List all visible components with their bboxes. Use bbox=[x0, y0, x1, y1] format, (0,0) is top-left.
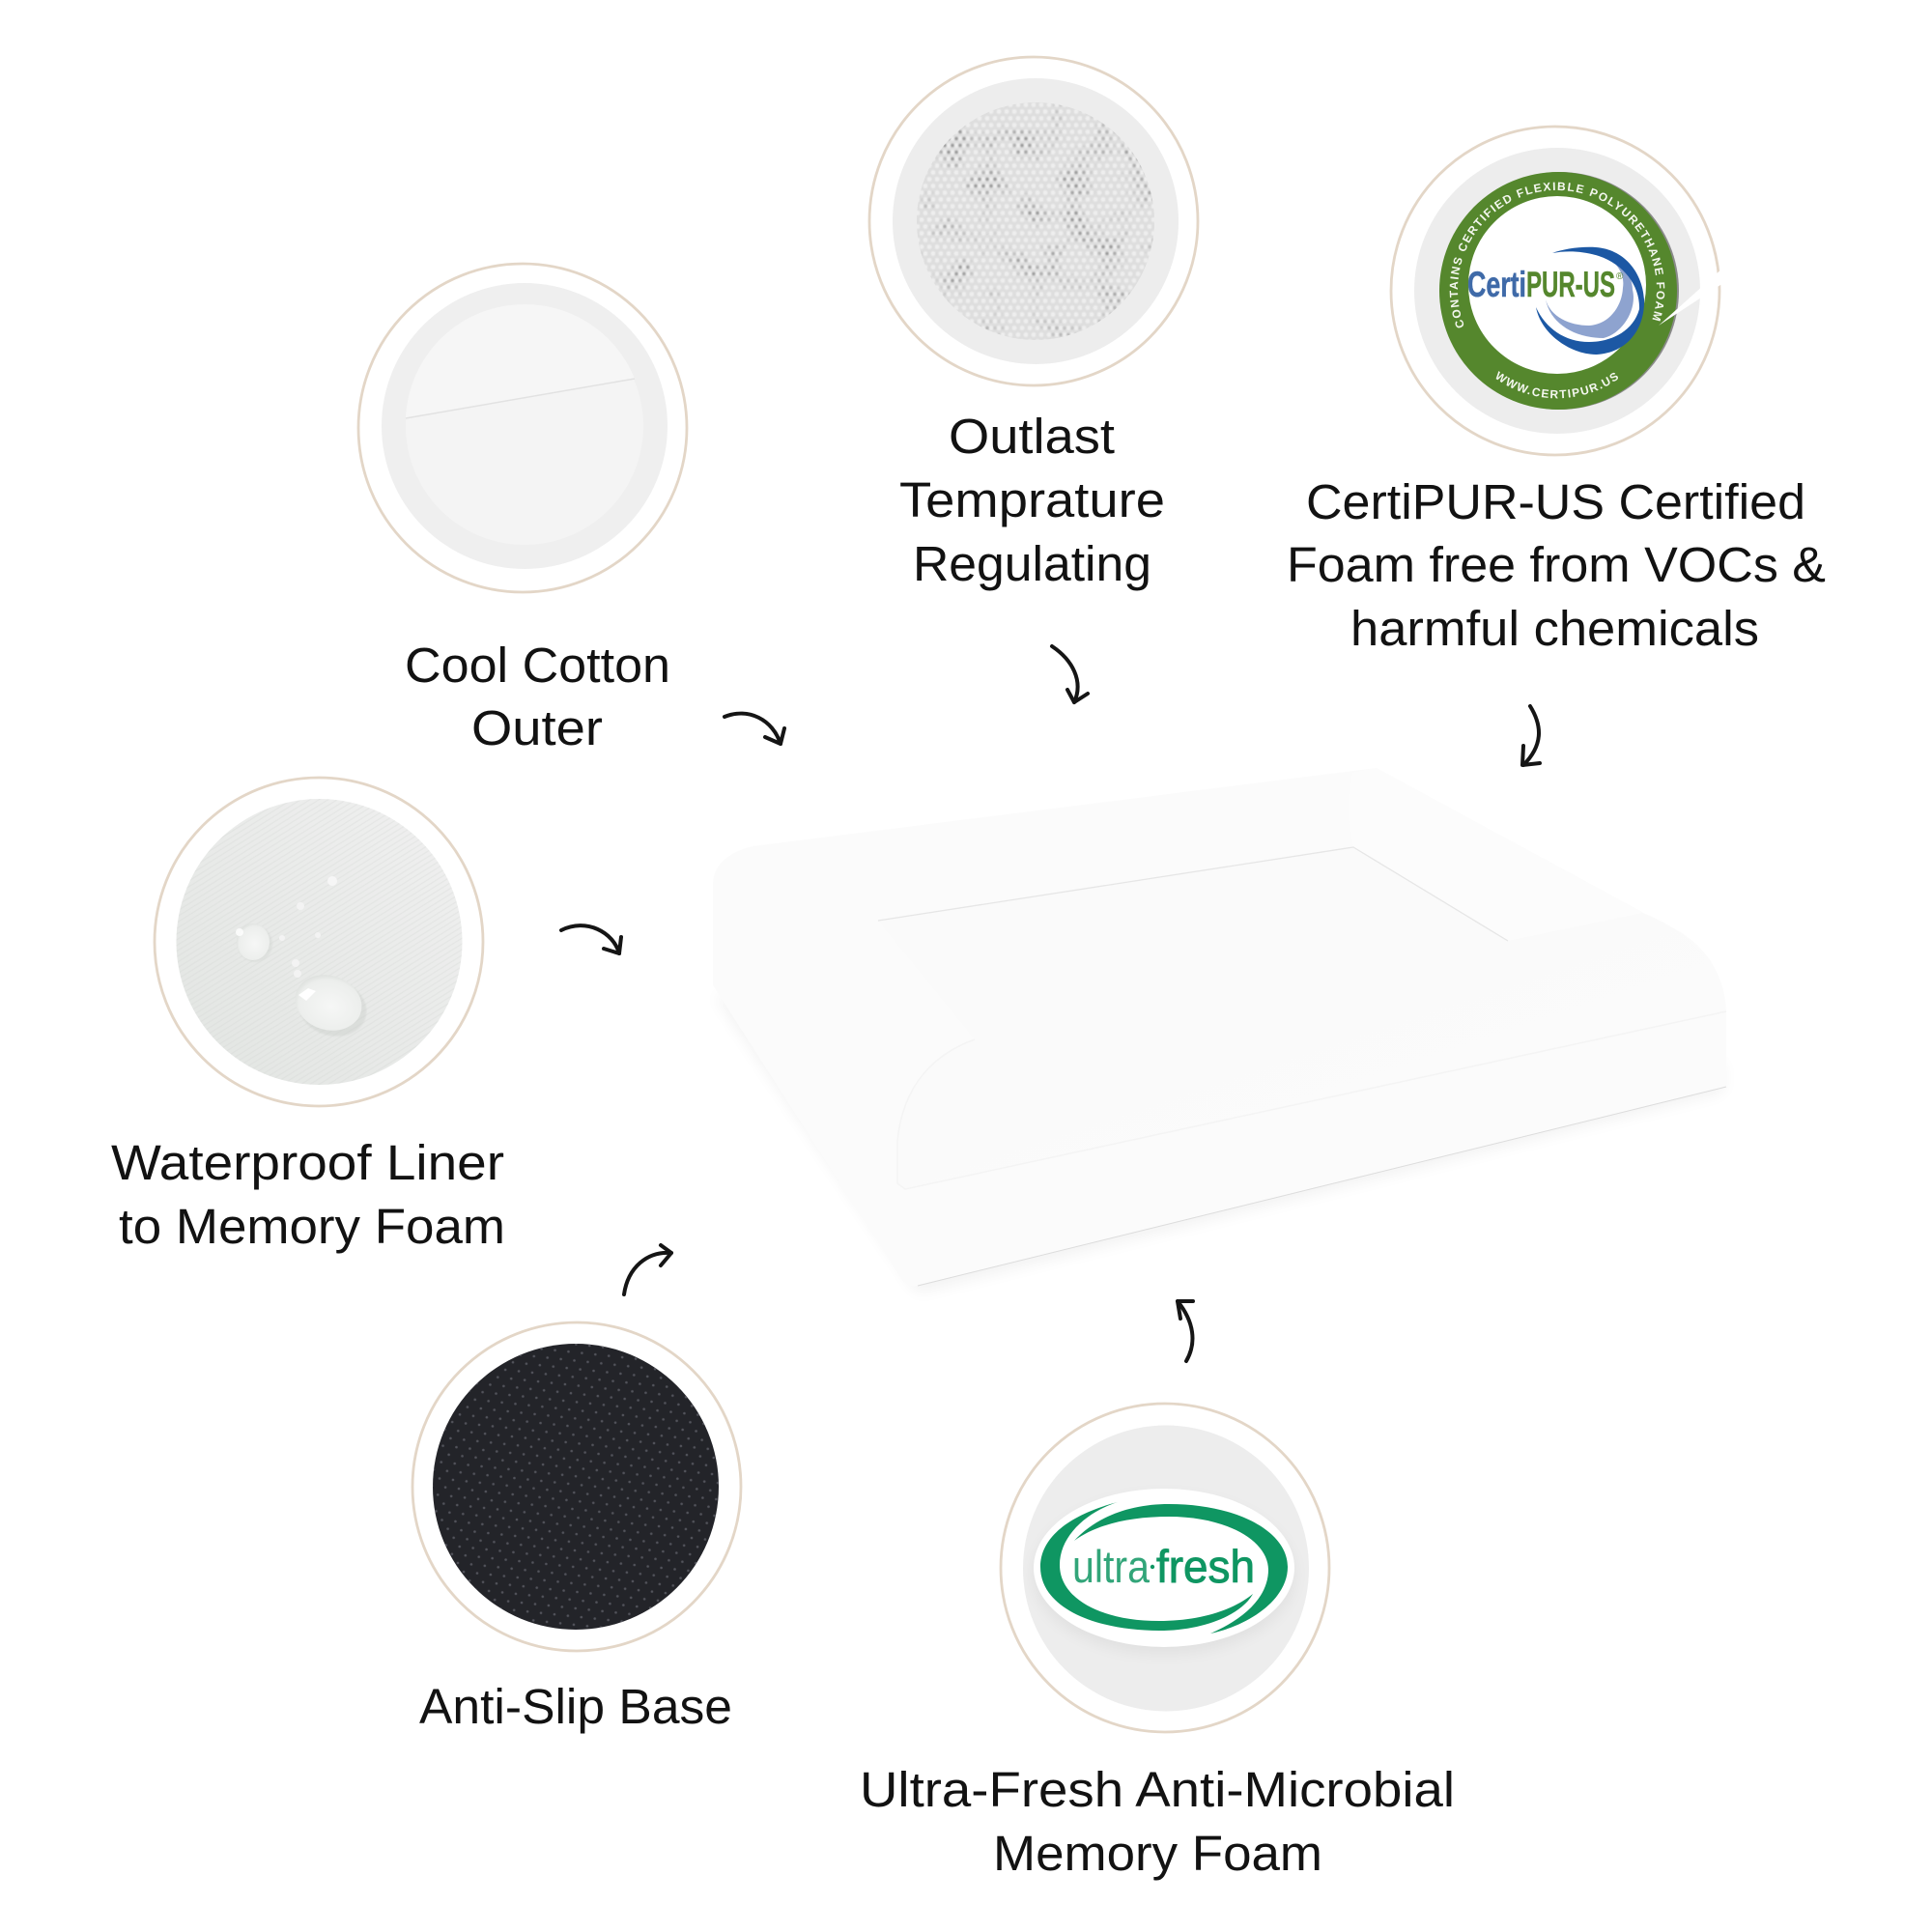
label: certipur-us certified foam: CertiPUR-US Certified bbox=[1306, 474, 1805, 529]
label: waterproof liner to memory foam: Waterproof Liner bbox=[111, 1135, 504, 1190]
badge ring text: WWW.CERTIPUR.US bbox=[1495, 371, 1618, 398]
label: certipur-us certified foam bbox=[1287, 474, 1826, 656]
badge ring text: CONTAINS CERTIFIED FLEXIBLE POLYURETHANE FOAM bbox=[1449, 182, 1665, 328]
feature: ultra-fresh anti-microbial bbox=[860, 1301, 1455, 1881]
cotton swatch circle bbox=[358, 264, 687, 592]
label: certipur-us certified foam: harmful chemicals bbox=[1350, 601, 1759, 656]
certipur-us wordmark: PUR-US bbox=[1526, 265, 1615, 304]
feature: waterproof liner bbox=[111, 778, 621, 1254]
ultra-fresh wordmark: fresh bbox=[1156, 1541, 1255, 1592]
arrow: waterproof to bed bbox=[561, 925, 621, 953]
arrow: anti-slip to bed bbox=[624, 1245, 671, 1294]
label: outlast temprature regulating: Temprature bbox=[899, 472, 1165, 527]
certipur-us badge circle bbox=[1389, 126, 1721, 456]
arrow: outlast to bed bbox=[1052, 646, 1088, 702]
label: ultra-fresh anti-microbial memory foam: Ultra-Fresh Anti-Microbial bbox=[860, 1762, 1455, 1817]
anti-slip swatch circle bbox=[412, 1322, 741, 1651]
label: outlast temprature regulating bbox=[899, 409, 1165, 591]
arrow: certipur-us to bed bbox=[1522, 706, 1540, 765]
ultra-fresh wordmark: ultra bbox=[1072, 1541, 1151, 1592]
certipur-us wordmark: ® bbox=[1616, 271, 1624, 282]
bed product illustration bbox=[713, 768, 1726, 1293]
certipur-us wordmark bbox=[1467, 265, 1624, 304]
ultra-fresh wordmark bbox=[1072, 1541, 1255, 1592]
waterproof swatch circle with droplets bbox=[155, 778, 483, 1106]
ultra-fresh badge circle bbox=[1001, 1404, 1329, 1732]
label: waterproof liner to memory foam: to Memory Foam bbox=[119, 1199, 505, 1254]
certipur-us wordmark: Certi bbox=[1467, 265, 1526, 304]
label: ultra-fresh anti-microbial memory foam bbox=[860, 1762, 1455, 1881]
outlast swatch circle bbox=[869, 57, 1198, 385]
feature: certipur-us certified bbox=[1287, 126, 1826, 767]
arrow: ultra-fresh to bed bbox=[1178, 1301, 1193, 1361]
feature: outlast temperature regulating bbox=[869, 57, 1198, 702]
label: ultra-fresh anti-microbial memory foam: Memory Foam bbox=[993, 1826, 1322, 1881]
label: anti-slip base: Anti-Slip Base bbox=[419, 1679, 732, 1734]
label: outlast temprature regulating: Outlast bbox=[949, 409, 1115, 464]
label: cool cotton outer: Cool Cotton bbox=[405, 638, 670, 693]
badge ring text bbox=[1449, 182, 1665, 398]
label: outlast temprature regulating: Regulating bbox=[913, 536, 1151, 591]
feature: anti-slip base bbox=[412, 1245, 741, 1734]
label: waterproof liner to memory foam bbox=[111, 1135, 505, 1254]
feature: cool cotton outer bbox=[358, 264, 784, 755]
label: cool cotton outer bbox=[405, 638, 670, 755]
arrow: cotton to bed bbox=[724, 714, 784, 744]
blue swooshes bbox=[1536, 247, 1644, 355]
label: cool cotton outer: Outer bbox=[471, 700, 603, 755]
ultra-fresh logo swooshes bbox=[1040, 1502, 1288, 1634]
label: certipur-us certified foam: Foam free from VOCs & bbox=[1287, 537, 1826, 592]
